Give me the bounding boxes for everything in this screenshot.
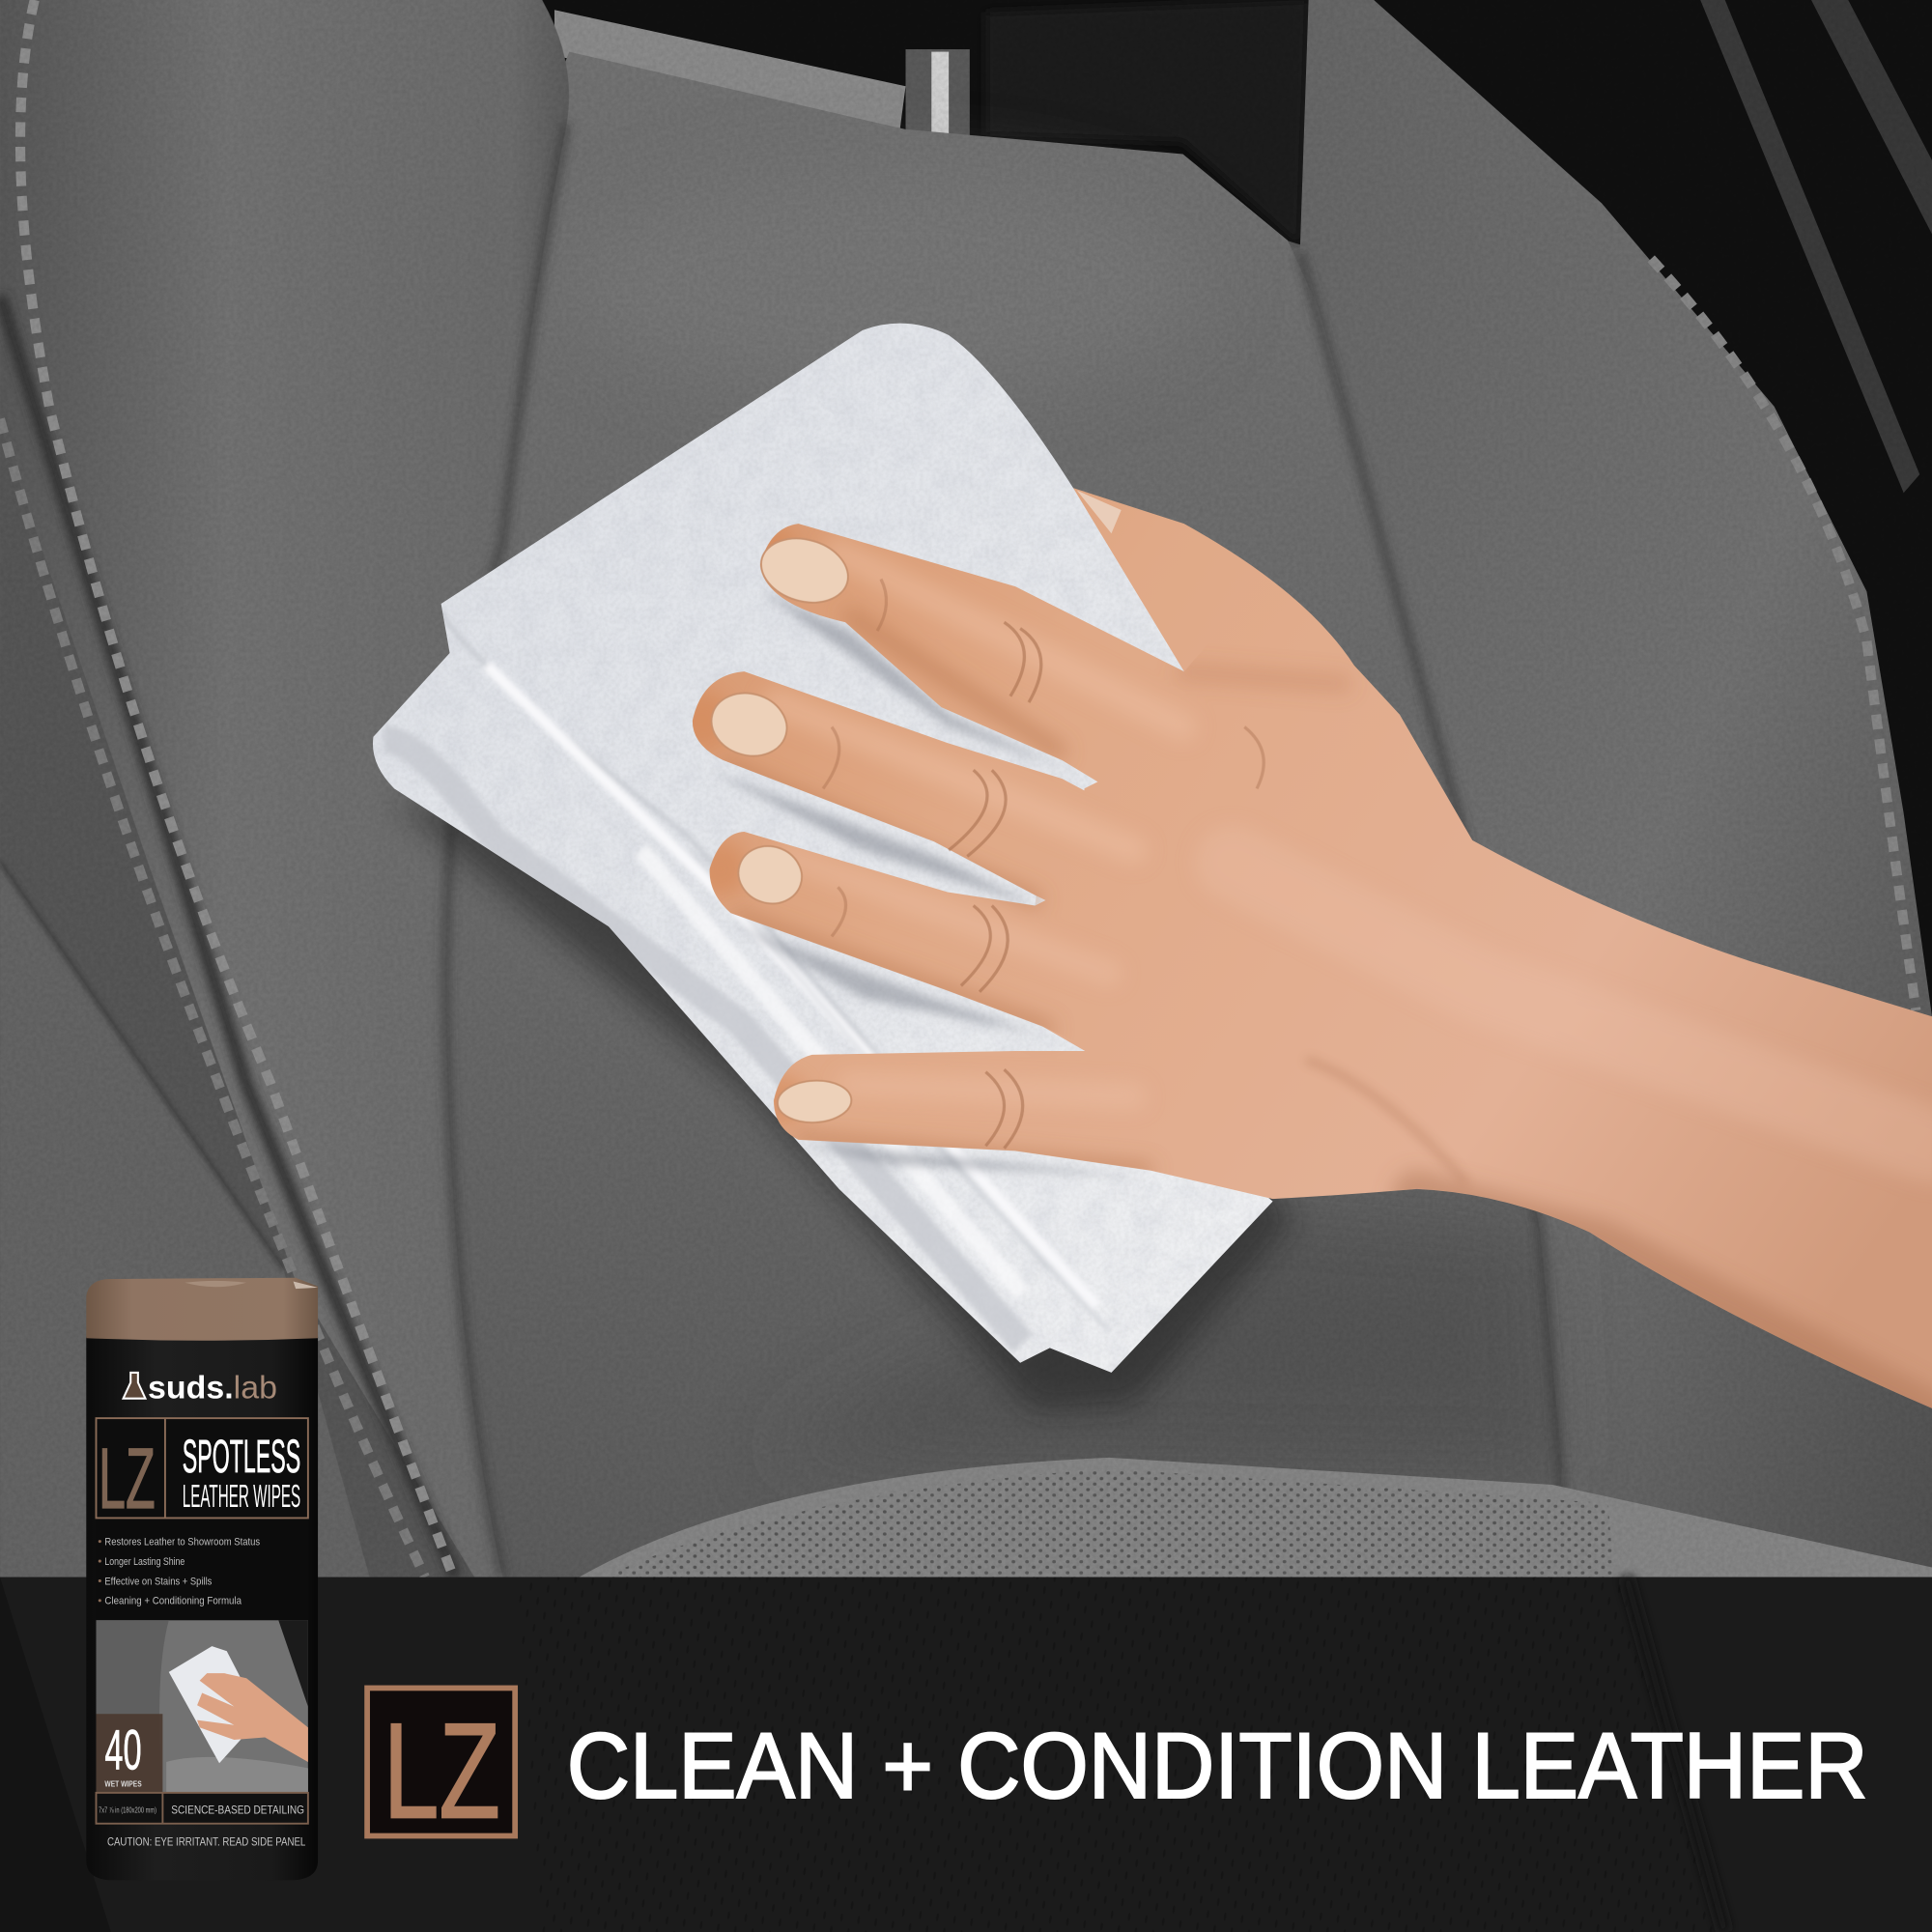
LZ logo box: LZ [384,1694,500,1846]
canister cap [86,1278,318,1341]
benefits list: Longer Lasting Shine [104,1556,185,1568]
cleaning wipe [370,314,1282,1374]
bolster seams [0,124,1562,1577]
stitching left [0,0,453,1577]
wrist tendon [1306,1060,1466,1182]
count badge 40 wet wipes: WET WIPES [104,1778,142,1788]
finger tips tint [672,525,807,1125]
finger shadows on wipe [708,591,1146,1177]
caution line: CAUTION: EYE IRRITANT. READ SIDE PANEL [107,1835,306,1849]
centre seat panel [443,52,1562,1577]
dark bottom band [0,1577,1932,1932]
count badge 40 wet wipes: 40 [104,1719,142,1782]
rear interior and headrest post [542,0,1932,1023]
little finger [774,1051,1273,1199]
mini product photo [96,1620,308,1793]
seat base with perforations [579,1458,1932,1577]
canister body [86,1337,318,1880]
finger nails [704,528,856,1124]
ring finger [710,832,1182,1072]
product title box: SPOTLESS [183,1431,300,1483]
knuckle creases [823,579,1264,1149]
benefits list: Cleaning + Conditioning Formula [104,1596,242,1607]
benefits list: Restores Leather to Showroom Status [104,1536,260,1548]
right seat bolster [1300,0,1932,1577]
size and tagline strip: SCIENCE-BASED DETAILING [171,1804,304,1817]
product title box [96,1418,308,1526]
size and tagline strip: 7x7 ⅞ in (180x200 mm) [99,1804,156,1814]
benefits list: Effective on Stains + Spills [104,1576,213,1587]
hand fingers [672,524,1932,1417]
left seat bolster [0,0,569,1577]
skin light and shade [672,525,1932,1417]
count badge 40 wet wipes [96,1714,162,1793]
hand back, thumb and forearm [1062,488,1932,1408]
index finger [760,524,1306,838]
wipe shadow [394,801,1293,1410]
size and tagline strip [96,1793,308,1824]
benefits list [96,1520,308,1620]
product canister [86,1278,318,1880]
brand logo suds.lab: suds.lab [148,1371,277,1406]
middle finger [693,671,1220,949]
lower left panel [0,425,474,1577]
centre panel shading [567,173,1552,1466]
product title box: LZ [99,1430,156,1526]
stitching right [1651,259,1916,1010]
headline: CLEAN + CONDITION LEATHER [567,1713,1868,1818]
product canister: LEATHER WIPES [183,1479,300,1515]
wipe folds [384,610,1109,1343]
thumb nail [1077,491,1122,533]
